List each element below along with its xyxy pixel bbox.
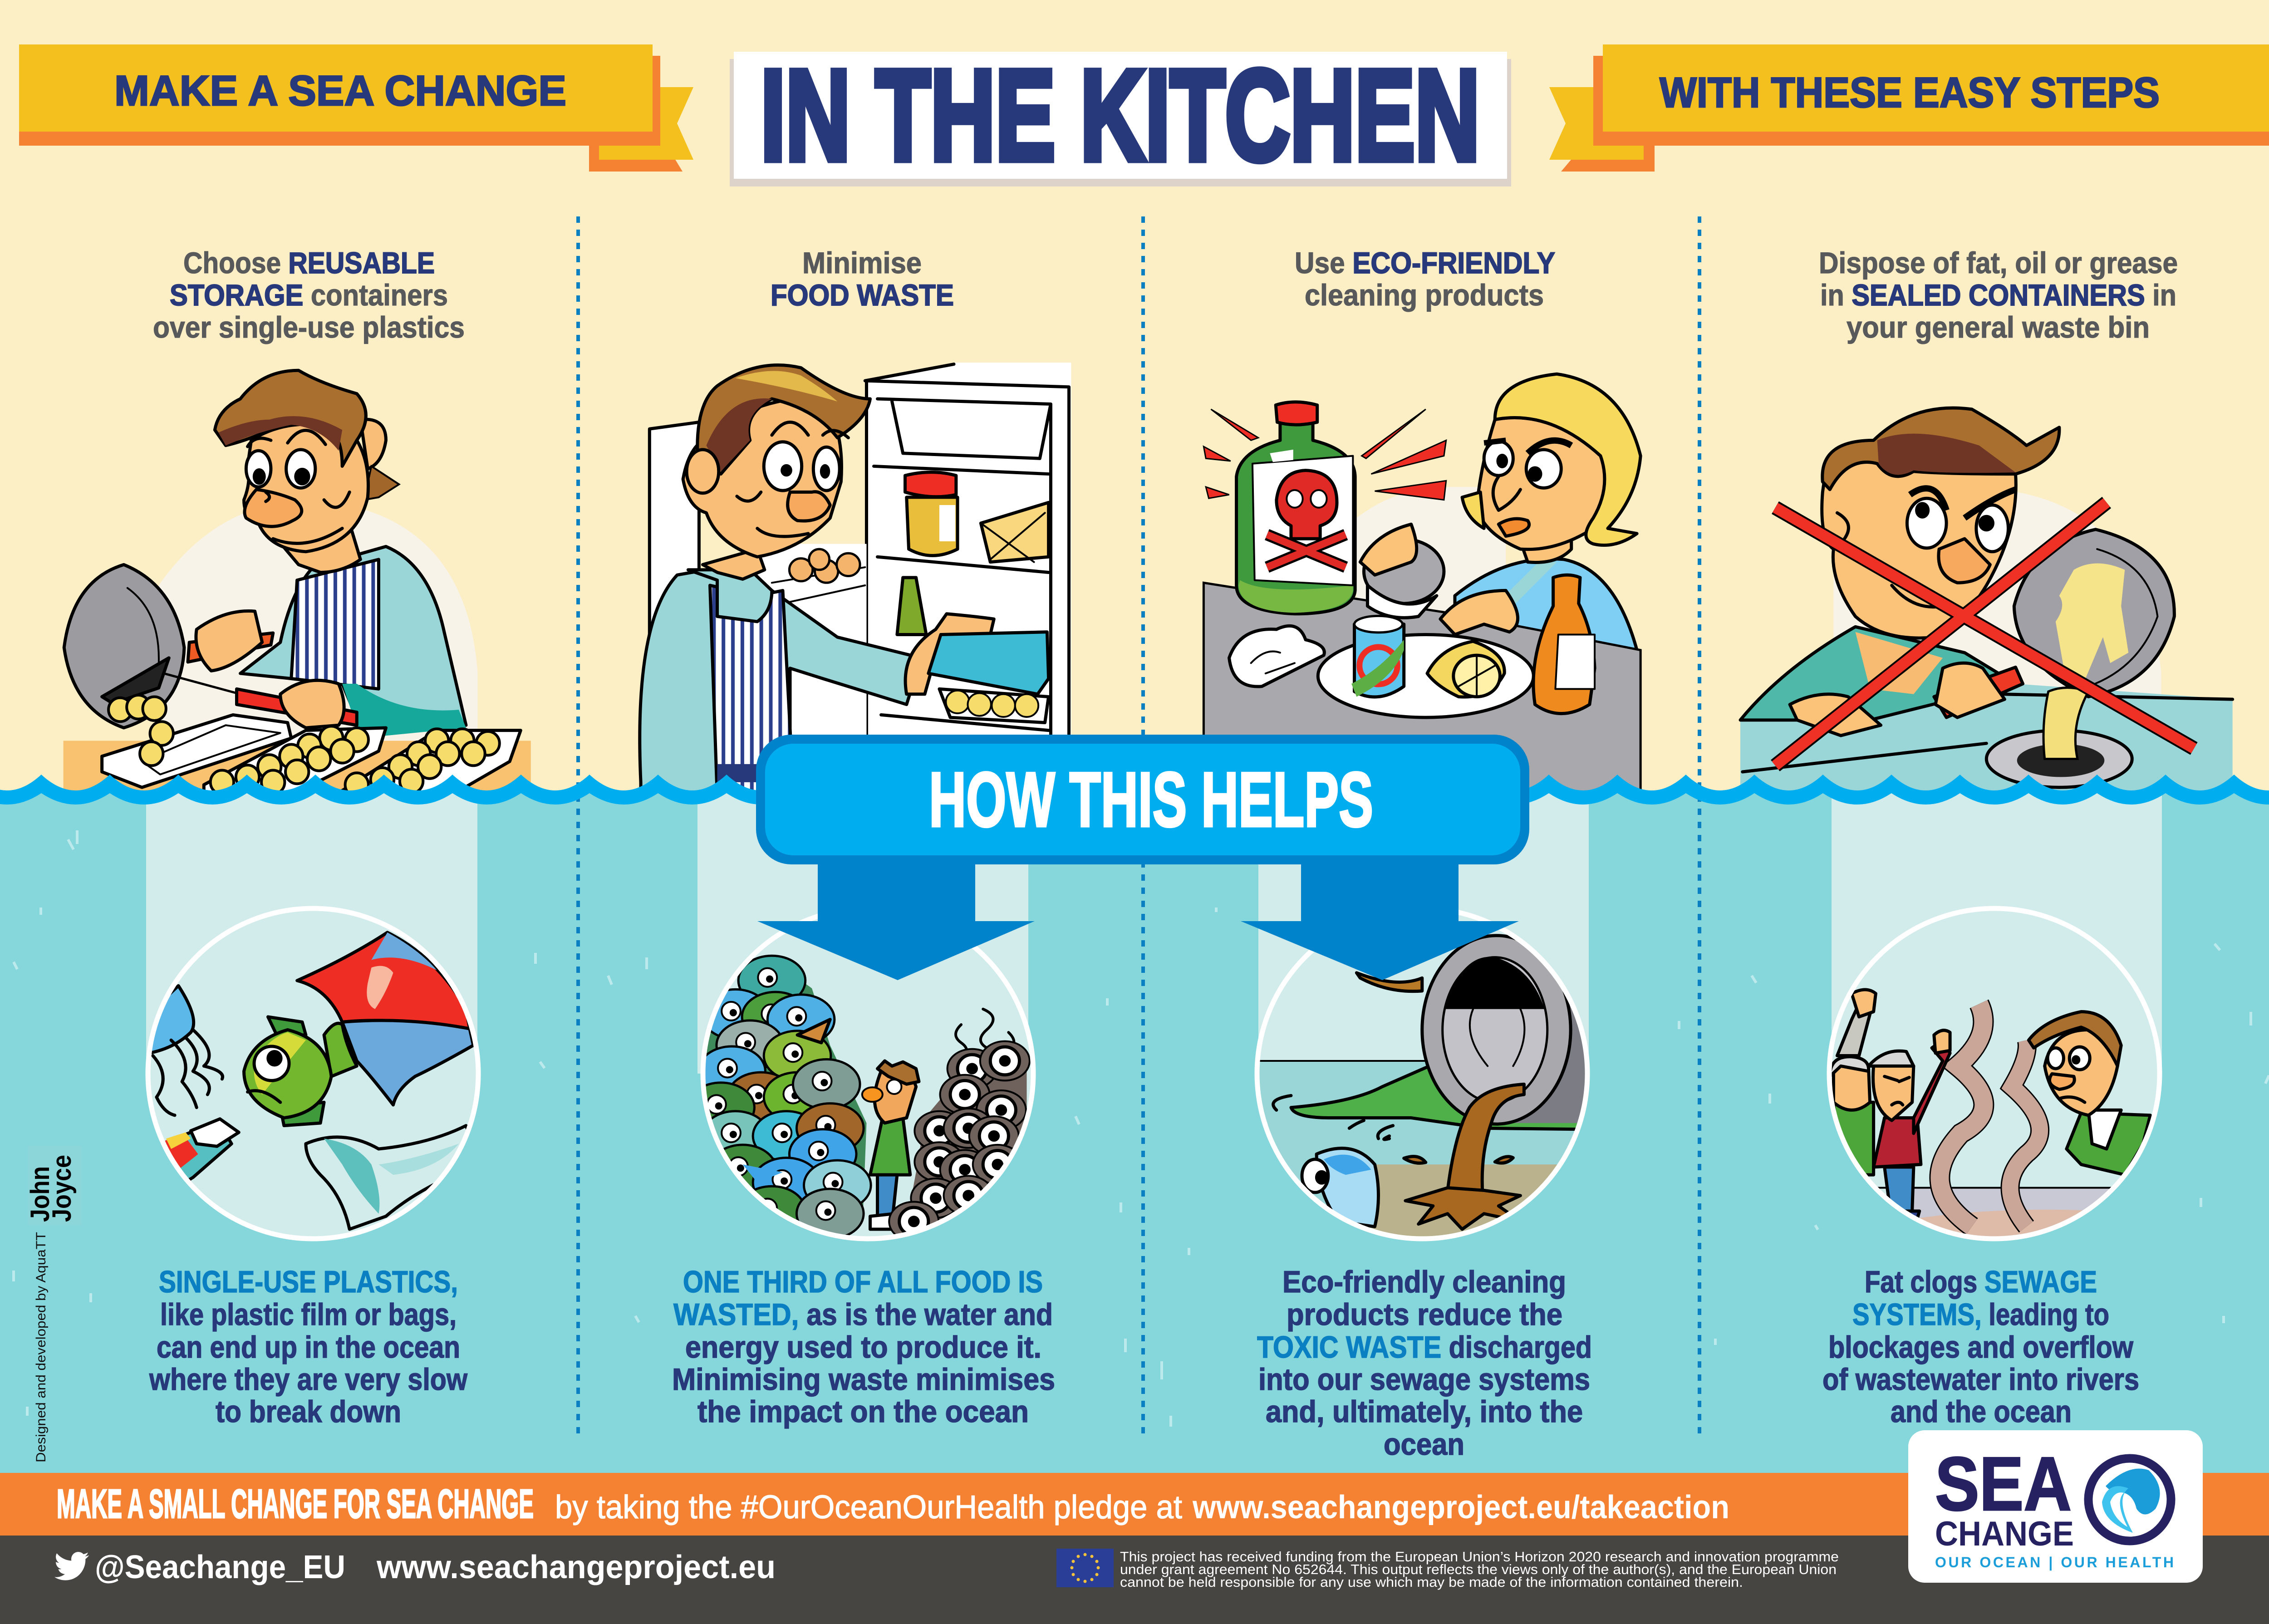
impact text 4: blockages and overflow bbox=[1828, 1330, 2134, 1364]
impact text 4: of wastewater into rivers bbox=[1822, 1362, 2139, 1397]
impact text 1: can end up in the ocean bbox=[157, 1330, 460, 1364]
designer credit: Designed and developed by AquaTT bbox=[34, 1232, 49, 1462]
impact text 1: SINGLE-USE PLASTICS, bbox=[159, 1265, 458, 1299]
impact text 3: TOXIC WASTE discharged bbox=[1257, 1330, 1592, 1364]
social handle and website: www.seachangeproject.eu bbox=[376, 1549, 776, 1585]
step 3 heading: cleaning products bbox=[1305, 278, 1544, 312]
Sea Change logo: CHANGE bbox=[1935, 1515, 2074, 1553]
step 3 heading: Use ECO-FRIENDLY bbox=[1295, 246, 1555, 280]
Sea Change logo bbox=[1908, 1430, 2203, 1583]
icon: twitter bird bbox=[54, 1552, 89, 1580]
Sea Change logo: SEA bbox=[1935, 1441, 2072, 1526]
orange pledge bar: www.seachangeproject.eu/takeaction bbox=[1192, 1489, 1729, 1526]
impact text 3 bbox=[1257, 1265, 1592, 1462]
illustration circle: plastic pollution with fish bbox=[142, 908, 481, 1239]
artist signature: John bbox=[25, 1166, 55, 1222]
illustration: woman comparing toxic bottle with eco-friendly cleaners bbox=[1203, 374, 1640, 798]
icon: EU flag bbox=[1056, 1549, 1114, 1587]
illustration circle: toxic waste discharged from a pipe bbox=[1251, 908, 1608, 1247]
step 4 heading: Dispose of fat, oil or grease bbox=[1819, 246, 2178, 280]
funding disclaimer: cannot be held responsible for any use which may be made of the information contained therein. bbox=[1120, 1574, 1743, 1590]
impact text 4: Fat clogs SEWAGE bbox=[1865, 1265, 2097, 1299]
speckle texture bbox=[14, 830, 2269, 1427]
ocean water background bbox=[0, 792, 2269, 1475]
column dividers bbox=[578, 216, 1699, 1439]
impact text 1: to break down bbox=[216, 1394, 401, 1429]
arrow: left, pointing down from how this helps bbox=[757, 862, 1035, 980]
impact text 2: the impact on the ocean bbox=[697, 1394, 1029, 1429]
impact text 1 bbox=[149, 1265, 468, 1429]
how this helps banner bbox=[756, 735, 1529, 864]
banner ribbon: left bbox=[19, 44, 693, 172]
dark footer bar bbox=[0, 1536, 2269, 1624]
impact text 3: and, ultimately, into the bbox=[1266, 1394, 1583, 1429]
orange pledge bar: by taking the #OurOceanOurHealth pledge at bbox=[555, 1489, 1182, 1526]
light water columns bbox=[146, 792, 2162, 1074]
banner ribbon: right bbox=[1549, 44, 2269, 172]
illustration: man putting leftovers in the fridge bbox=[640, 363, 1071, 798]
impact text 4 bbox=[1822, 1265, 2139, 1429]
background: cream paper bbox=[0, 0, 2269, 799]
illustration circle: angry residents and sewage smell bbox=[1829, 908, 2160, 1242]
impact text 2: ONE THIRD OF ALL FOOD IS bbox=[683, 1265, 1043, 1299]
impact text 4: and the ocean bbox=[1891, 1394, 2072, 1429]
impact text 4: SYSTEMS, leading to bbox=[1852, 1297, 2109, 1332]
step 2 heading bbox=[771, 246, 954, 312]
social handle and website bbox=[95, 1549, 776, 1585]
artist signature bbox=[25, 1146, 82, 1225]
impact text 3: into our sewage systems bbox=[1258, 1362, 1590, 1397]
impact text 3: Eco-friendly cleaning bbox=[1282, 1265, 1566, 1299]
main title: IN THE KITCHEN bbox=[761, 44, 1480, 187]
impact text 3: ocean bbox=[1384, 1427, 1464, 1462]
step 4 heading: your general waste bin bbox=[1847, 310, 2150, 344]
illustration: man pouring grease down the sink, crossed out in red bbox=[1740, 408, 2233, 798]
social handle and website: @Seachange_EU bbox=[95, 1549, 345, 1585]
step 3 heading bbox=[1295, 246, 1555, 312]
funding disclaimer bbox=[1120, 1549, 1839, 1590]
funding disclaimer: This project has received funding from the European Union’s Horizon 2020 research and innovation programme bbox=[1120, 1549, 1839, 1565]
step 2 heading: Minimise bbox=[802, 246, 922, 280]
Sea Change logo: OUR OCEAN | OUR HEALTH bbox=[1935, 1554, 2174, 1570]
step 1 heading: over single-use plastics bbox=[153, 310, 465, 344]
impact text 1: where they are very slow bbox=[149, 1362, 468, 1397]
how this helps banner: HOW THIS HELPS bbox=[929, 756, 1373, 843]
banner ribbon: right: WITH THESE EASY STEPS bbox=[1660, 69, 2160, 116]
step 1 heading: Choose REUSABLE bbox=[183, 246, 435, 280]
illustration: man cooking and storing food in reusable containers bbox=[64, 370, 531, 798]
orange pledge bar: MAKE A SMALL CHANGE FOR SEA CHANGE bbox=[57, 1482, 534, 1527]
impact text 2: Minimising waste minimises bbox=[672, 1362, 1055, 1397]
step 2 heading: FOOD WASTE bbox=[771, 278, 954, 312]
impact text 2 bbox=[672, 1265, 1055, 1429]
banner ribbon: left: MAKE A SEA CHANGE bbox=[114, 67, 566, 114]
impact text 2: WASTED, as is the water and bbox=[673, 1297, 1053, 1332]
funding disclaimer: under grant agreement No 652644. This output reflects the views only of the author(s), and the European Union bbox=[1120, 1561, 1837, 1577]
step 4 heading bbox=[1819, 246, 2178, 344]
impact text 1: like plastic film or bags, bbox=[160, 1297, 457, 1332]
arrow: right, pointing down from how this helps bbox=[1241, 862, 1519, 980]
impact text 2: energy used to produce it. bbox=[685, 1330, 1041, 1364]
step 1 heading: STORAGE containers bbox=[170, 278, 448, 312]
wave band bbox=[0, 775, 2269, 805]
illustration circle: food waste, pile of fish beside a person bbox=[688, 908, 1033, 1242]
orange pledge bar bbox=[0, 1473, 2269, 1536]
step 4 heading: in SEALED CONTAINERS in bbox=[1820, 278, 2176, 312]
artist signature: Joyce bbox=[47, 1155, 77, 1222]
impact text 3: products reduce the bbox=[1287, 1297, 1562, 1332]
step 1 heading bbox=[153, 246, 465, 344]
